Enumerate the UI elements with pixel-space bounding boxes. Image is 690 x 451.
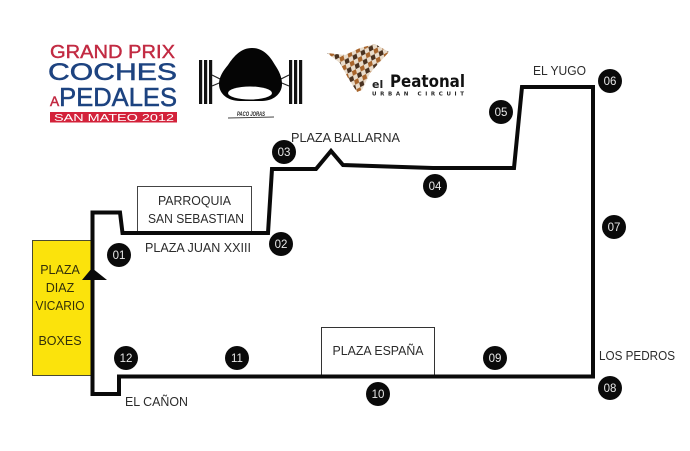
icon: right wheel xyxy=(289,60,302,104)
marker 03: 03 xyxy=(278,147,290,159)
label: Plaza Juan XXIII: PLAZA JUAN XXIII xyxy=(145,241,251,255)
marker 08: 08 xyxy=(604,383,616,395)
logo wordmark: el: el xyxy=(372,78,383,91)
logo heading: a Pedales: APEDALES xyxy=(50,82,177,112)
marker 07 xyxy=(602,215,626,239)
marker 05: 05 xyxy=(495,107,507,119)
icon: checkered flag xyxy=(327,44,389,92)
marker 08 xyxy=(598,376,622,400)
marker 05 xyxy=(489,100,513,124)
logo tagline: URBAN CIRCUIT xyxy=(372,92,464,98)
logo banner: San Mateo 2012: SAN MATEO 2012 xyxy=(54,113,175,124)
boxes label: VICARIO xyxy=(36,299,85,313)
label: El Cañon: EL CAÑON xyxy=(125,395,188,409)
race circuit track xyxy=(92,87,593,394)
panel: Plaza España xyxy=(322,328,434,376)
marker 11: 11 xyxy=(231,353,243,365)
marker 07: 07 xyxy=(608,222,620,234)
marker 09: 09 xyxy=(489,353,501,365)
logo: Grand Prix Coches a Pedales xyxy=(48,42,177,124)
label: El Yugo: EL YUGO xyxy=(533,64,586,78)
boxes label: BOXES xyxy=(38,334,82,348)
car logo caption: PACO JORAS xyxy=(237,111,265,118)
marker 11 xyxy=(225,346,249,370)
boxes label: DIAZ xyxy=(46,281,75,295)
icon: cockpit opening xyxy=(228,86,272,100)
marker 02: 02 xyxy=(275,239,287,251)
panel: Plaza Diaz Vicario boxes xyxy=(32,240,92,376)
marker 10: 10 xyxy=(372,389,384,401)
marker 09 xyxy=(483,346,507,370)
boxes label xyxy=(36,263,85,348)
panel: Parroquia San Sebastian: SAN SEBASTIAN xyxy=(148,212,244,226)
numbered checkpoints xyxy=(107,69,626,406)
icon: car body xyxy=(219,48,282,101)
marker 12: 12 xyxy=(120,353,132,365)
icon: axle arms xyxy=(212,75,289,86)
marker 06: 06 xyxy=(604,76,616,88)
marker 02 xyxy=(269,232,293,256)
location labels xyxy=(125,64,675,409)
marker 04: 04 xyxy=(429,181,442,193)
logo heading: Coches: COCHES xyxy=(48,59,177,86)
panel: Plaza España: PLAZA ESPAÑA xyxy=(332,344,424,358)
marker 06 xyxy=(598,69,622,93)
label: Plaza Ballarna: PLAZA BALLARNA xyxy=(291,131,401,145)
marker 01: 01 xyxy=(113,250,125,262)
logo: pedal car xyxy=(199,48,302,118)
marker 10 xyxy=(366,382,390,406)
logo heading: Grand Prix: GRAND PRIX xyxy=(50,42,175,62)
logo wordmark: Peatonal: Peatonal xyxy=(390,72,465,91)
marker 01 xyxy=(107,243,131,267)
label: Los Pedros: LOS PEDROS xyxy=(599,349,675,363)
arrow: race direction xyxy=(82,268,107,280)
marker 12 xyxy=(114,346,138,370)
panel: Parroquia San Sebastian xyxy=(138,186,252,234)
marker 03 xyxy=(272,140,296,164)
boxes label: PLAZA xyxy=(40,263,80,277)
marker 04 xyxy=(423,174,447,198)
icon: left wheel xyxy=(199,60,212,104)
panel: Parroquia San Sebastian: PARROQUIA xyxy=(158,194,232,208)
logo: el Peatonal xyxy=(327,44,465,98)
